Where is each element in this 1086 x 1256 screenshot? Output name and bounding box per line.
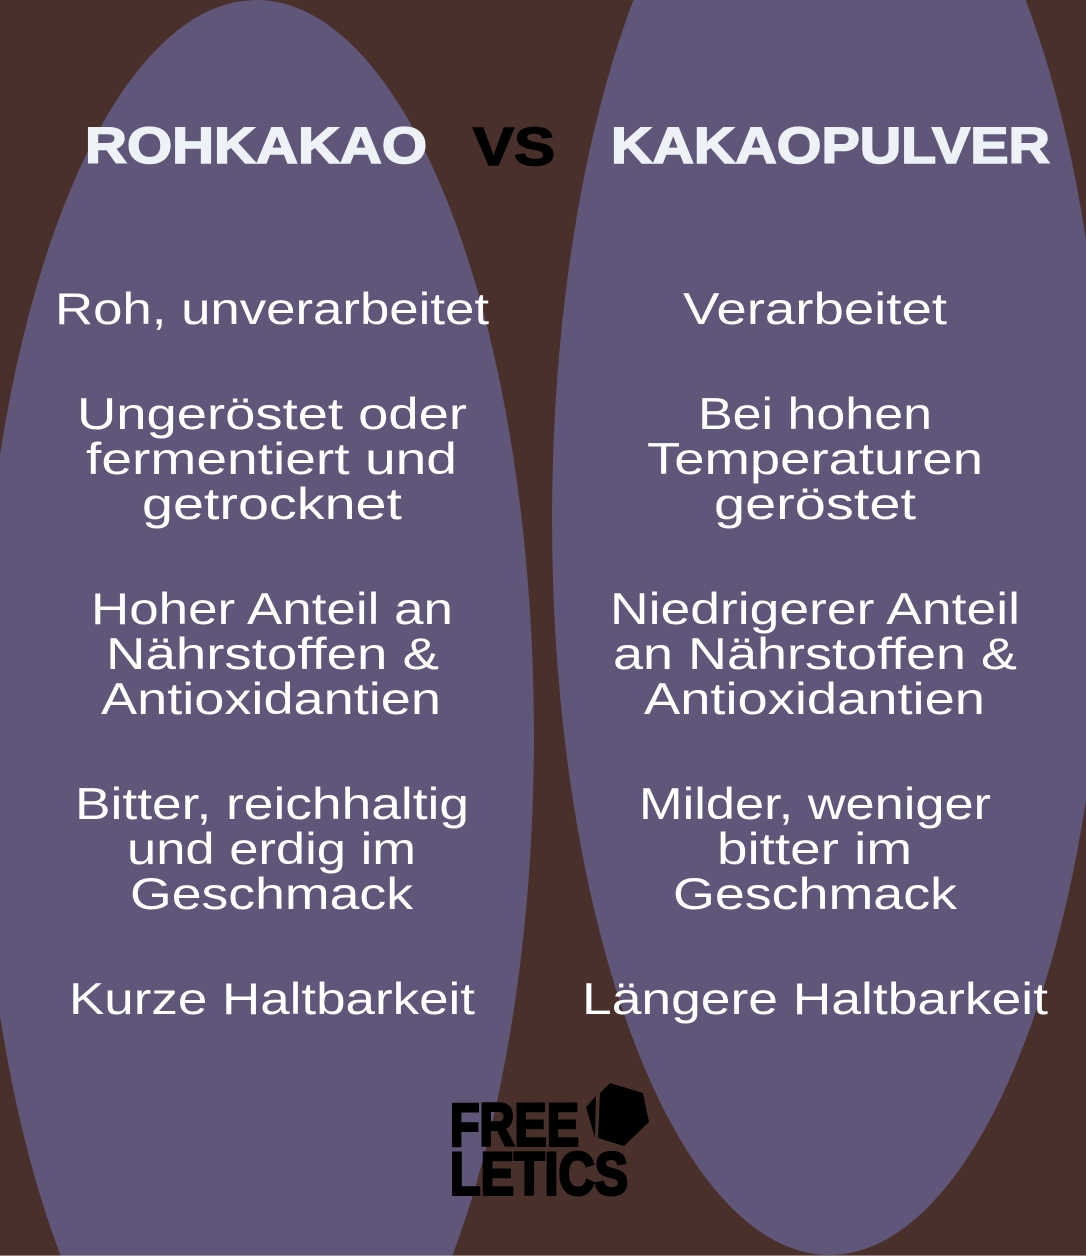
right oval: Kakaopulver: [552, 0, 1086, 1255]
text: roasting: Temperaturen: [647, 435, 983, 484]
text: nutrients: an Nährstoffen &: [613, 630, 1017, 679]
text: roasting: geröstet: [714, 480, 917, 529]
text: nutrients: [91, 585, 453, 724]
text: taste: Milder, weniger: [639, 780, 991, 829]
text: taste: [75, 780, 469, 919]
left column text: [55, 285, 490, 1024]
heading: Kakaopulver: KAKAOPULVER: [611, 117, 1050, 174]
left oval: Rohkakao: [0, 0, 534, 1256]
icon: pentagon: [586, 1083, 649, 1146]
text: nutrients: [610, 585, 1020, 724]
text: taste: Bitter, reichhaltig: [75, 780, 469, 829]
text: nutrients: Nährstoffen &: [106, 630, 439, 679]
text: roasting: Ungeröstet oder: [77, 390, 467, 439]
heading: vs: VS: [473, 117, 555, 177]
text: roasting: [647, 390, 983, 529]
text: taste: und erdig im: [127, 825, 416, 874]
right column text: [582, 285, 1049, 1024]
heading: Rohkakao: ROHKAKAO: [85, 117, 427, 174]
text: shelf life: Kurze Haltbarkeit: [69, 975, 476, 1024]
text: taste: [639, 780, 991, 919]
text: nutrients: Antioxidantien: [101, 675, 441, 724]
logo wordmark line 1: FREE: [450, 1092, 579, 1158]
text: taste: Geschmack: [130, 870, 414, 919]
text: shelf life: Längere Haltbarkeit: [582, 975, 1049, 1024]
text: nutrients: Antioxidantien: [644, 675, 985, 724]
text: processing: Verarbeitet: [683, 285, 948, 334]
logo: Freeletics: [450, 1083, 649, 1208]
logo wordmark line 2: LETICS: [450, 1140, 628, 1208]
text: roasting: fermentiert und: [86, 435, 457, 484]
text: nutrients: Niedrigerer Anteil: [610, 585, 1020, 634]
text: taste: Geschmack: [673, 870, 958, 919]
text: roasting: [77, 390, 467, 529]
text: taste: bitter im: [717, 825, 912, 874]
text: nutrients: Hoher Anteil an: [91, 585, 453, 634]
text: processing: Roh, unverarbeitet: [55, 285, 490, 334]
text: roasting: Bei hohen: [698, 390, 932, 439]
text: roasting: getrocknet: [142, 480, 403, 529]
